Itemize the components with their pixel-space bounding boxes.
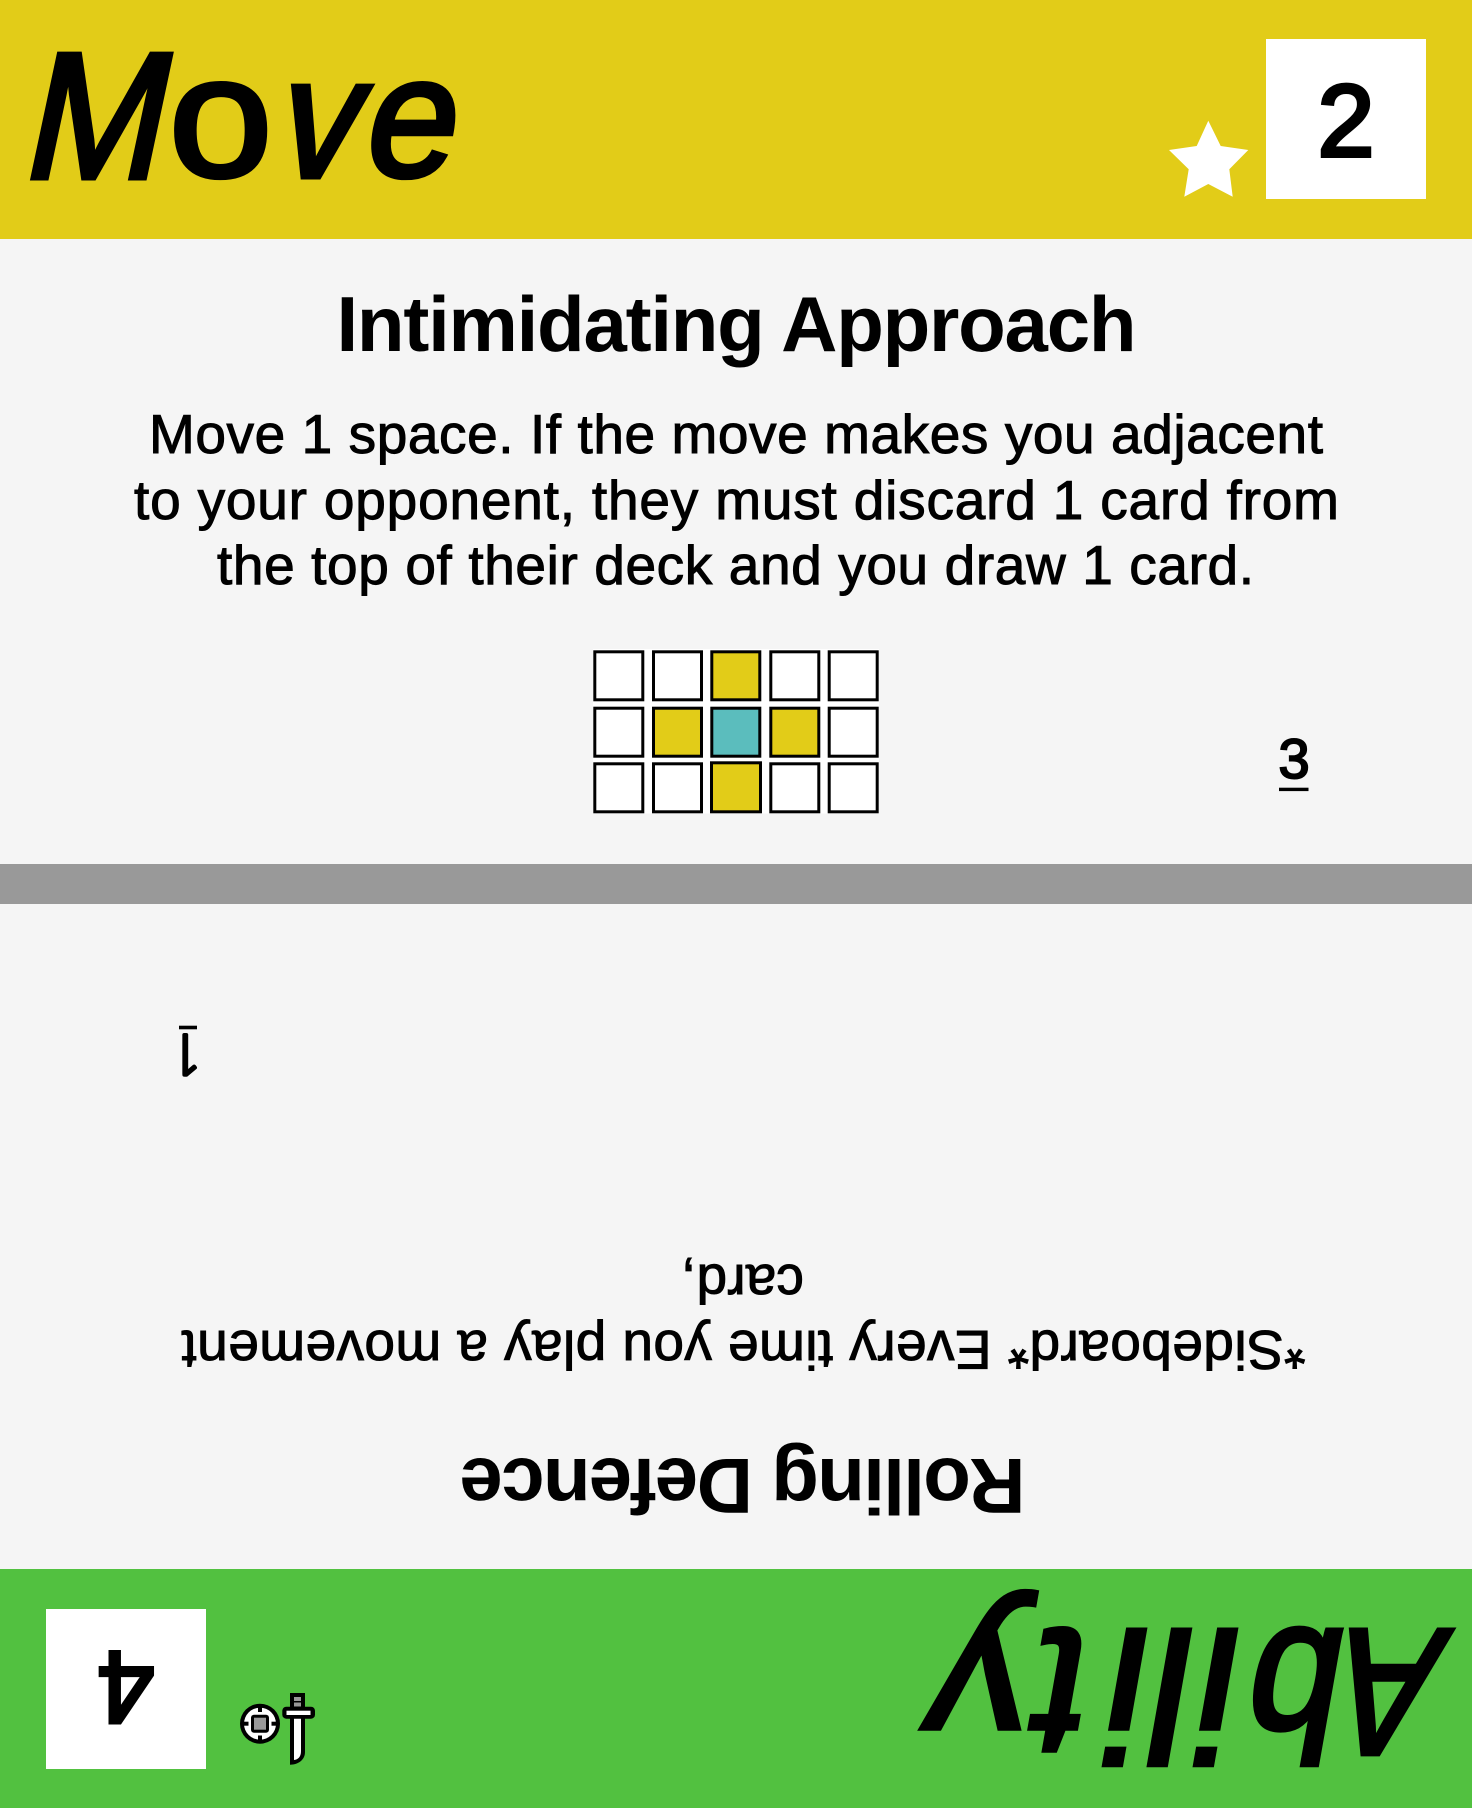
movement grid <box>593 649 879 814</box>
heading: Move: M <box>11 16 193 217</box>
heading: Move: e <box>354 20 478 213</box>
icon: sword <box>282 1693 315 1765</box>
heading: Ability: A <box>1310 1591 1463 1792</box>
heading: Ability <box>909 1590 1463 1799</box>
cost box: 2: 2 <box>1318 64 1374 178</box>
yellow header band <box>0 0 1472 239</box>
cost box: 4 <box>46 1609 206 1769</box>
card rules text <box>134 403 1339 596</box>
card title: Intimidating Approach <box>336 280 1136 368</box>
card title: Rolling Defence <box>460 1442 1026 1530</box>
heading: Ability: l <box>1131 1590 1209 1799</box>
heading: Ability: y <box>909 1590 1043 1798</box>
card rules text: the top of their deck and you draw 1 card. <box>217 534 1254 596</box>
card rules text: Move 1 space. If the move makes you adjacent <box>149 403 1323 465</box>
heading: Ability: i <box>1086 1590 1164 1799</box>
green header band <box>0 1569 1472 1808</box>
heading: Ability: b <box>1229 1590 1359 1799</box>
heading: Move: o <box>169 20 272 213</box>
heading: Ability: i <box>1177 1590 1255 1799</box>
heading: Ability: t <box>1015 1590 1103 1799</box>
underlined value: 1: 1 <box>170 1025 204 1081</box>
card rules text: *Sideboard* Every time you play a movement <box>182 1319 1306 1381</box>
panel: top Move half <box>0 0 1472 814</box>
icon: round shield <box>240 1704 280 1744</box>
heading: Move: v <box>263 21 387 214</box>
card rules text: card, <box>681 1253 804 1315</box>
grey divider band <box>0 864 1472 904</box>
icon: shield and sword <box>240 1693 315 1765</box>
underlined value: 3: 3 <box>1278 727 1310 790</box>
icon: star <box>1169 121 1248 197</box>
cost box: 4: 4 <box>98 1630 154 1744</box>
cost box: 2 <box>1266 39 1426 199</box>
card rules text <box>182 1253 1306 1381</box>
card rules text: to your opponent, they must discard 1 card from <box>134 469 1339 531</box>
heading: Move <box>11 16 478 217</box>
panel: bottom Ability half, rotated 180 degrees <box>0 1025 1472 1808</box>
